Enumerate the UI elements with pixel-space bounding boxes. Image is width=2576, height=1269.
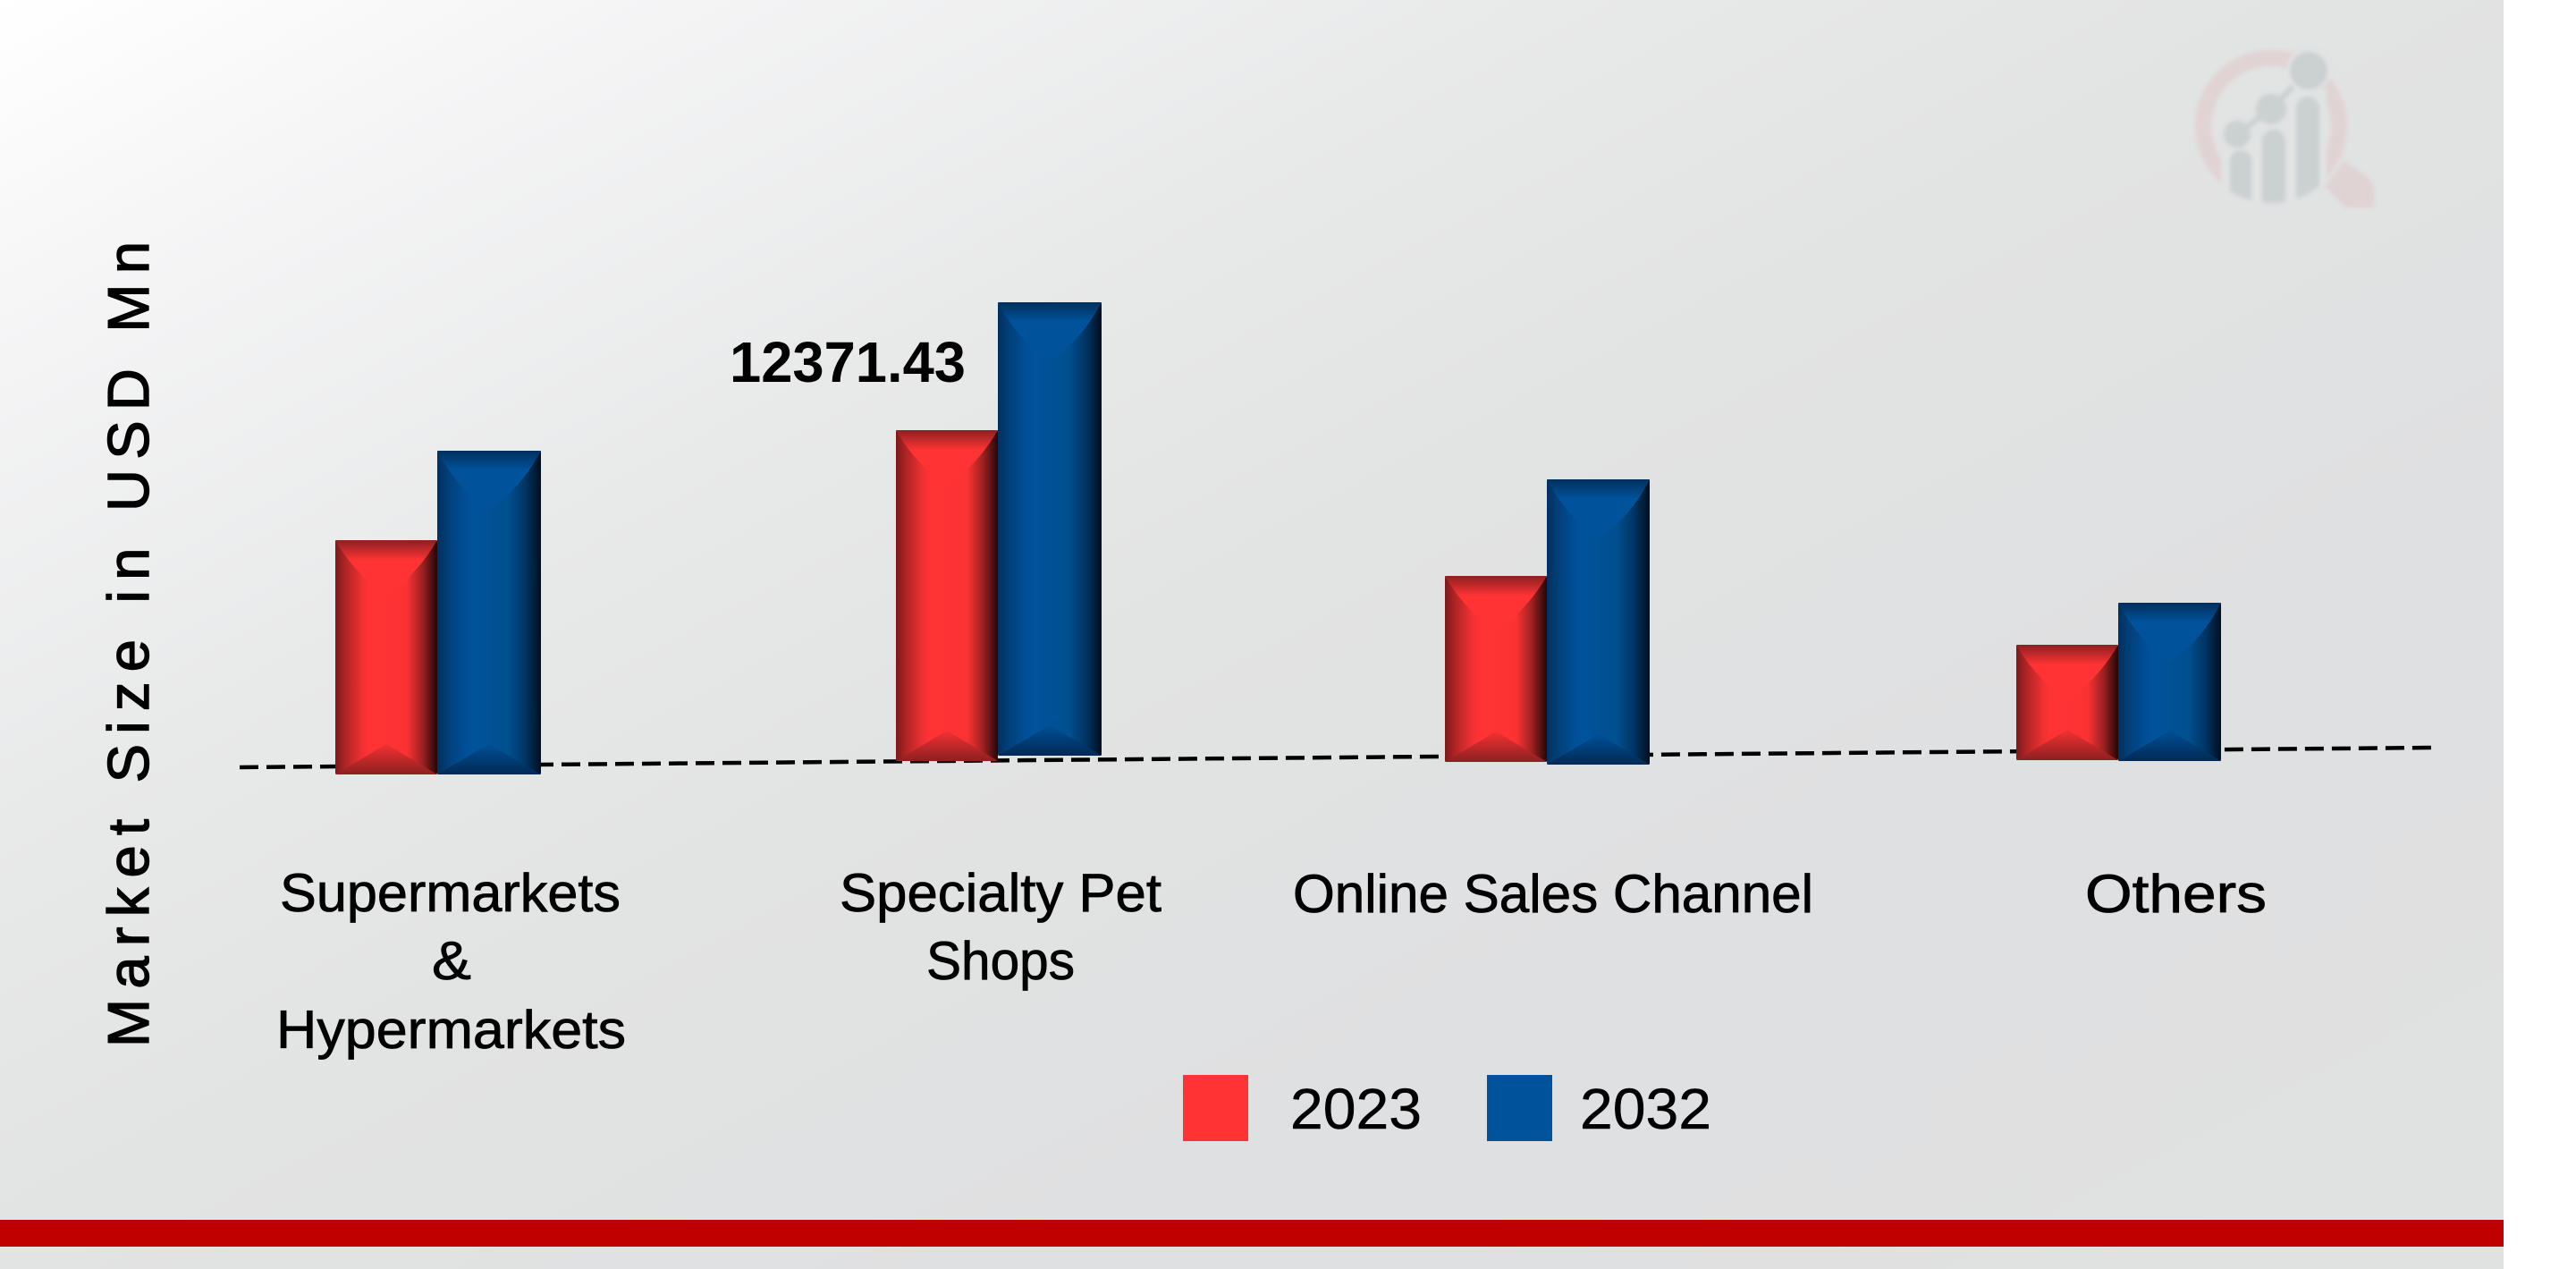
y-axis title: Market Size in USD Mn	[96, 241, 161, 1047]
bar group: Others	[2016, 603, 2221, 761]
legend label 2023: 2023	[1290, 1077, 1422, 1141]
value label: 12371.43	[730, 330, 966, 394]
bar: Supermarkets 2023	[335, 540, 437, 774]
category label: Specialty Pet Shops: Specialty Pet	[840, 863, 1161, 923]
bar group: Online Sales Channel	[1445, 479, 1650, 765]
legend swatch 2023	[1183, 1075, 1248, 1141]
footer red band	[0, 1220, 2504, 1247]
legend label 2032: 2032	[1580, 1077, 1711, 1141]
legend	[1183, 1075, 1711, 1141]
category label: Supermarkets & Hypermarkets: Hypermarkets	[276, 1000, 626, 1060]
logo watermark	[2203, 48, 2374, 213]
bar: Supermarkets 2032	[437, 451, 541, 774]
bar: Specialty Pet Shops 2032	[998, 302, 1102, 756]
bar group: Specialty Pet Shops	[896, 302, 1102, 761]
category label: Specialty Pet Shops: Shops	[926, 931, 1075, 991]
baseline dashed line	[240, 748, 2432, 767]
bar group: Supermarkets & Hypermarkets	[335, 451, 541, 774]
category label: Specialty Pet Shops	[840, 863, 1161, 991]
category label: Supermarkets & Hypermarkets: &	[432, 931, 471, 991]
category label: Supermarkets & Hypermarkets: Supermarkets	[280, 863, 621, 923]
bar: Online Sales Channel 2023	[1445, 576, 1547, 762]
category label: Supermarkets & Hypermarkets	[276, 863, 626, 1060]
category label: Online Sales Channel: Online Sales Channel	[1293, 864, 1813, 924]
bar: Specialty Pet Shops 2023	[896, 430, 998, 761]
bar: Others 2032	[2118, 603, 2221, 761]
bar: Online Sales Channel 2032	[1547, 479, 1650, 765]
category label: Others: Others	[2085, 864, 2267, 924]
legend swatch 2032	[1487, 1075, 1552, 1141]
bar: Others 2023	[2016, 645, 2118, 760]
